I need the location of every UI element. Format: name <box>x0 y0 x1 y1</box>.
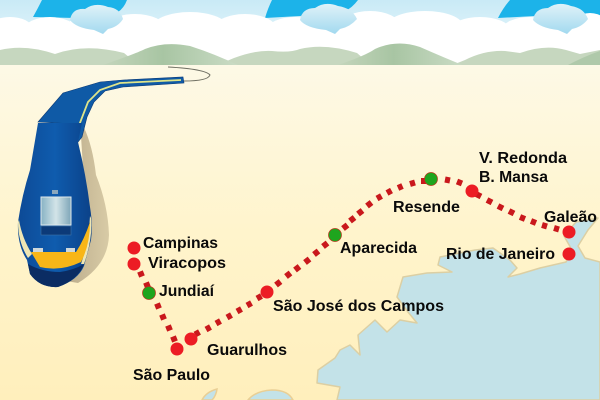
station: Viracopos <box>128 258 140 270</box>
station: Guarulhos <box>184 332 198 346</box>
hills <box>0 43 600 66</box>
label: Campinas: Campinas <box>143 235 218 252</box>
station: Campinas <box>128 242 140 254</box>
station: Aparecida <box>328 228 342 242</box>
front carriage body <box>18 123 92 287</box>
sky with clouds <box>0 0 600 66</box>
label: Jundiaí: Jundiaí <box>159 283 215 300</box>
label: Resende: Resende <box>393 199 460 216</box>
label: Guarulhos: Guarulhos <box>207 342 287 359</box>
dark bumper <box>28 264 84 287</box>
lamp <box>52 190 58 194</box>
label: São Paulo: São Paulo <box>133 367 210 384</box>
yellow nose band <box>31 222 90 269</box>
train shadow <box>60 120 109 283</box>
carriage stripe <box>78 80 181 128</box>
label: V. Redonda: V. Redonda <box>479 150 567 167</box>
route dashes <box>140 180 559 342</box>
label: B. Mansa: B. Mansa <box>479 169 548 186</box>
nose lights <box>33 248 75 252</box>
vivid blue sky patches <box>33 0 600 18</box>
station: Resende <box>424 172 438 186</box>
sea and coastline <box>317 218 600 400</box>
station: Jundiaí <box>142 286 156 300</box>
station: São José dos Campos <box>260 286 274 298</box>
train <box>18 67 210 287</box>
station labels <box>133 150 597 384</box>
station: Rio de Janeiro <box>562 248 576 260</box>
cream side edges <box>18 216 91 264</box>
label: São José dos Campos: São José dos Campos <box>273 298 444 315</box>
train tail line <box>168 67 210 81</box>
light blue cloud puffs <box>70 4 588 34</box>
label: Galeão: Galeão <box>544 209 597 226</box>
panel under windscreen <box>41 226 71 235</box>
rear carriages <box>38 77 184 142</box>
station: Volta Redonda / Barra Mansa <box>466 184 478 198</box>
bays at the bottom edge <box>202 389 293 400</box>
station: São Paulo <box>170 342 184 356</box>
label: Rio de Janeiro: Rio de Janeiro <box>446 246 555 263</box>
station: Galeão <box>562 226 576 238</box>
windscreen <box>41 197 71 225</box>
route stations <box>128 172 576 356</box>
label: Viracopos: Viracopos <box>148 255 226 272</box>
label: Aparecida: Aparecida <box>340 240 417 257</box>
